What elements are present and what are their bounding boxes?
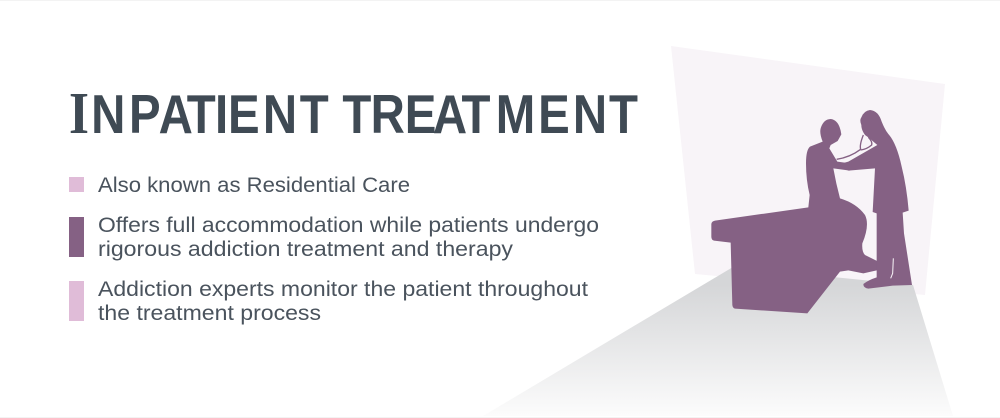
doctor (838, 110, 912, 289)
bullet 1 text: Also known as Residential Care (98, 174, 410, 197)
bullet 2 text (98, 214, 599, 261)
floor shadow (483, 267, 953, 416)
bullet 3 marker (69, 281, 84, 321)
stethoscope (837, 135, 872, 159)
table and patient (711, 119, 878, 313)
bullet 3 text: Addiction experts monitor the patient throughout (98, 278, 588, 301)
bullet 2 text: rigorous addiction treatment and therapy (98, 238, 514, 261)
bullet list (69, 174, 599, 325)
bullet 1 marker (69, 177, 84, 192)
title: I (69, 81, 89, 146)
bullet 2 text: Offers full accommodation while patients undergo (98, 214, 599, 237)
icon: doctor examining patient on table silhouette (711, 110, 912, 313)
bullet 2 marker (69, 217, 84, 257)
bullet 3 text: the treatment process (98, 302, 321, 325)
panel: back wall (671, 46, 945, 295)
title: NPATIENT TREATMENT (91, 84, 638, 145)
gap between doctor legs (891, 258, 893, 278)
bullet 3 text (98, 278, 588, 325)
